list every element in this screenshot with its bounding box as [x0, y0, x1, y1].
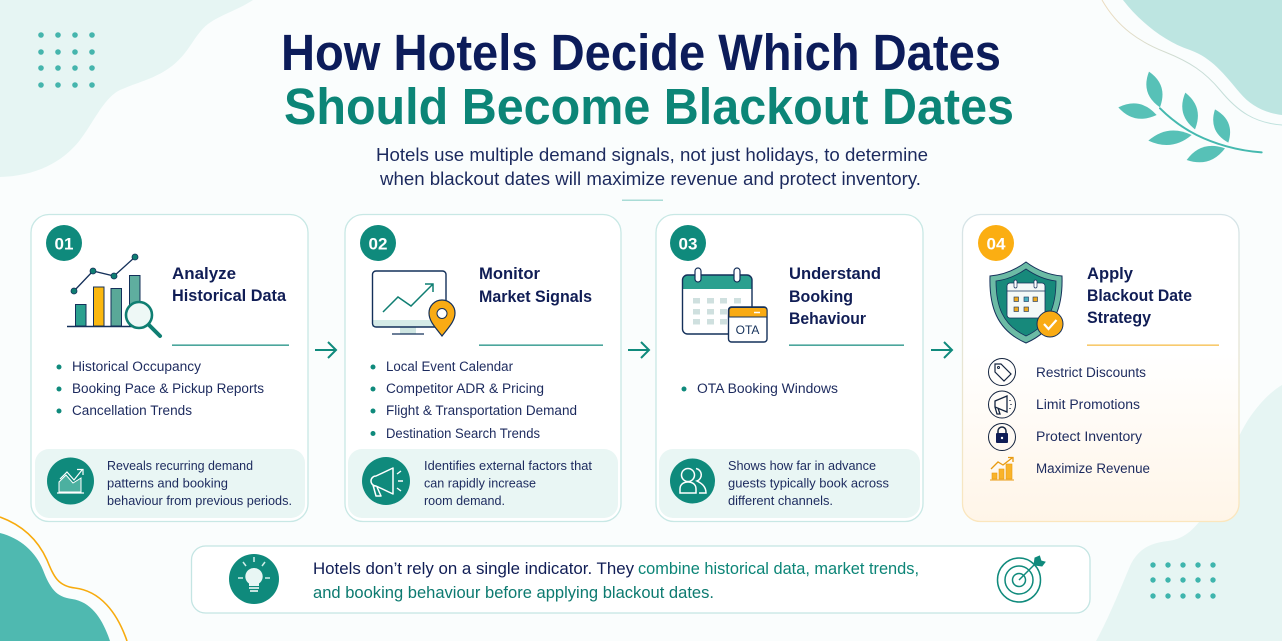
step badge 03: 03 — [679, 234, 697, 254]
step badge 02: 02 — [369, 234, 387, 254]
bullet list: Historical Occupancy — [72, 359, 201, 374]
insight text: can rapidly increase — [424, 476, 536, 490]
insight panel — [348, 449, 618, 518]
callout text — [313, 560, 919, 602]
step badge 03 — [670, 225, 706, 261]
panel: step 01 analyze historical data — [31, 214, 308, 522]
action list: Limit Promotions — [1036, 397, 1140, 412]
bullet list: Local Event Calendar — [386, 359, 513, 374]
subtitle: when blackout dates will maximize revenue and protect inventory. — [379, 168, 921, 189]
bullet list: OTA Booking Windows — [697, 381, 838, 396]
heading: Booking — [789, 287, 853, 306]
background blob: bottom right — [1096, 385, 1282, 641]
insight text — [424, 459, 593, 508]
background blob: top right — [1123, 0, 1282, 115]
bullet list: Competitor ADR & Pricing — [386, 381, 544, 396]
icon: shield with calendar — [990, 262, 1063, 343]
arrow 1 to 2 — [315, 342, 336, 358]
heading — [479, 264, 592, 306]
insight text: patterns and booking — [107, 476, 228, 490]
icon: trend chart — [47, 458, 94, 504]
bullet list: Cancellation Trends — [72, 403, 192, 418]
title: How Hotels Decide Which Dates — [281, 24, 1001, 81]
heading — [789, 264, 881, 328]
action list: Restrict Discounts — [1036, 365, 1146, 380]
background blob: bottom left — [0, 533, 110, 641]
dot grid: bottom right — [1150, 562, 1216, 599]
step badge 04 — [978, 225, 1014, 261]
subtitle — [376, 144, 928, 189]
heading: Strategy — [1087, 308, 1152, 327]
heading: Behaviour — [789, 309, 866, 328]
icon: revenue growth — [990, 458, 1014, 480]
action list: Maximize Revenue — [1036, 461, 1150, 476]
insight text: guests typically book across — [728, 476, 889, 490]
insight text: room demand. — [424, 494, 505, 508]
heading: Blackout Date — [1087, 286, 1192, 305]
bullet list: Destination Search Trends — [386, 426, 540, 441]
title: Should Become Blackout Dates — [284, 78, 1014, 135]
heading: Historical Data — [172, 286, 287, 305]
thin orange curve: bottom left — [0, 517, 127, 641]
panel: step 03 understand booking behaviour — [656, 214, 923, 522]
icon: calendar with OTA window: OTA — [736, 323, 759, 337]
heading: Analyze — [172, 264, 236, 283]
action list — [988, 358, 1150, 480]
callout text: Hotels don’t rely on a single indicator. They — [313, 560, 635, 578]
icon: promotion megaphone — [988, 391, 1016, 418]
icon: discount tag — [988, 358, 1016, 386]
callout text: and booking behaviour before applying blackout dates. — [313, 584, 714, 602]
action list: Protect Inventory — [1036, 429, 1142, 444]
heading: Monitor — [479, 264, 540, 283]
heading — [172, 264, 287, 305]
insight text: Identifies external factors that — [424, 459, 593, 473]
icon: light bulb — [229, 554, 279, 604]
panel: step 04 apply blackout date strategy — [962, 214, 1239, 522]
icon: padlock — [988, 424, 1016, 450]
step badge 01 — [46, 225, 82, 261]
icon: guests — [670, 458, 715, 504]
insight text: behaviour from previous periods. — [107, 494, 292, 508]
heading — [1087, 264, 1192, 327]
insight text — [728, 459, 889, 508]
bullet list — [56, 359, 264, 418]
arrow 3 to 4 — [931, 342, 952, 358]
bullet list — [370, 359, 577, 441]
callout: key takeaway — [192, 546, 1090, 613]
panel: step 02 monitor market signals — [345, 214, 621, 522]
background blob: top left — [0, 0, 253, 177]
thin curve: top right — [1102, 0, 1282, 125]
step badge 02 — [360, 225, 396, 261]
icon: target with arrow — [998, 556, 1045, 602]
step badge 04: 04 — [987, 234, 1006, 254]
bullet list: Flight & Transportation Demand — [386, 403, 577, 418]
insight text: different channels. — [728, 494, 833, 508]
icon: leaf branch — [1118, 72, 1262, 162]
icon: bar chart with magnifier — [67, 254, 160, 336]
insight text — [107, 459, 292, 508]
insight text: Reveals recurring demand — [107, 459, 253, 473]
dot grid: top left — [38, 32, 95, 88]
arrow 2 to 3 — [628, 342, 649, 358]
step badge 01: 01 — [55, 234, 73, 254]
icon: monitor with location pin — [372, 271, 455, 336]
subtitle: Hotels use multiple demand signals, not just holidays, to determine — [376, 144, 928, 165]
icon: calendar with OTA window — [682, 268, 767, 342]
icon: megaphone — [362, 457, 410, 505]
callout text: combine historical data, market trends, — [638, 560, 919, 578]
insight panel — [659, 449, 920, 518]
heading: Market Signals — [479, 287, 592, 306]
title — [281, 24, 1014, 135]
heading: Apply — [1087, 264, 1134, 283]
insight panel — [35, 449, 305, 518]
bullet list: Booking Pace & Pickup Reports — [72, 381, 264, 396]
heading: Understand — [789, 264, 881, 283]
insight text: Shows how far in advance — [728, 459, 876, 473]
